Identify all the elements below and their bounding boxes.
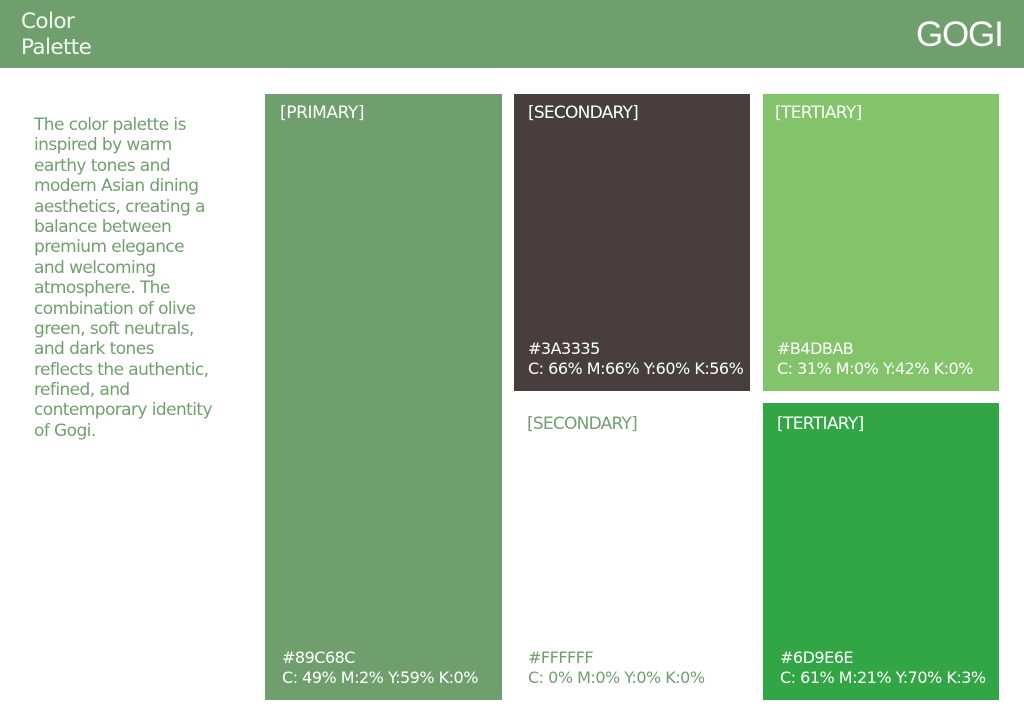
secondary dark values: C: 66% M:66% Y:60% K:56%: [528, 359, 743, 378]
description text: atmosphere. The: [34, 278, 170, 298]
title: Color: [21, 9, 74, 34]
panel: secondary dark swatch: [514, 94, 750, 391]
tertiary dark values: [780, 648, 986, 687]
description text: and welcoming: [34, 258, 156, 278]
description text: [34, 115, 212, 441]
description text: contemporary identity: [34, 400, 212, 420]
description text: premium elegance: [34, 237, 184, 257]
description text: combination of olive: [34, 299, 196, 319]
description text: earthy tones and: [34, 156, 170, 176]
description text: of Gogi.: [34, 421, 96, 441]
primary values: C: 49% M:2% Y:59% K:0%: [282, 668, 478, 687]
panel: primary swatch: [265, 94, 502, 700]
tertiary dark values: C: 61% M:21% Y:70% K:3%: [780, 668, 986, 687]
secondary white values: #FFFFFF: [528, 648, 593, 667]
tertiary dark values: #6D9E6E: [780, 648, 853, 667]
header band: [0, 0, 1024, 68]
secondary dark values: #3A3335: [528, 339, 600, 358]
panel: secondary white swatch: [514, 403, 750, 700]
primary values: [282, 648, 478, 687]
description text: refined, and: [34, 380, 130, 400]
panel: tertiary dark swatch: [763, 403, 999, 700]
title: [21, 9, 91, 60]
secondary dark values: [528, 339, 743, 378]
title: Palette: [21, 35, 91, 60]
description text: aesthetics, creating a: [34, 197, 205, 217]
panel: tertiary light swatch: [763, 94, 999, 391]
tertiary light label: [TERTIARY]: [775, 103, 862, 123]
description text: modern Asian dining: [34, 176, 198, 196]
description text: reflects the authentic,: [34, 360, 208, 380]
primary values: #89C68C: [282, 648, 355, 667]
description text: The color palette is: [34, 115, 186, 135]
secondary white values: [528, 648, 705, 687]
secondary white label: [SECONDARY]: [527, 414, 637, 434]
secondary dark label: [SECONDARY]: [528, 103, 638, 123]
description text: balance between: [34, 217, 171, 237]
tertiary light values: C: 31% M:0% Y:42% K:0%: [777, 359, 973, 378]
description text: green, soft neutrals,: [34, 319, 194, 339]
tertiary light values: [777, 339, 973, 378]
tertiary dark label: [TERTIARY]: [777, 414, 864, 434]
primary label: [PRIMARY]: [280, 103, 364, 123]
description text: and dark tones: [34, 339, 154, 359]
description text: inspired by warm: [34, 135, 172, 155]
logo: GOGI: [916, 15, 1003, 54]
secondary white values: C: 0% M:0% Y:0% K:0%: [528, 668, 705, 687]
tertiary light values: #B4DBAB: [777, 339, 853, 358]
